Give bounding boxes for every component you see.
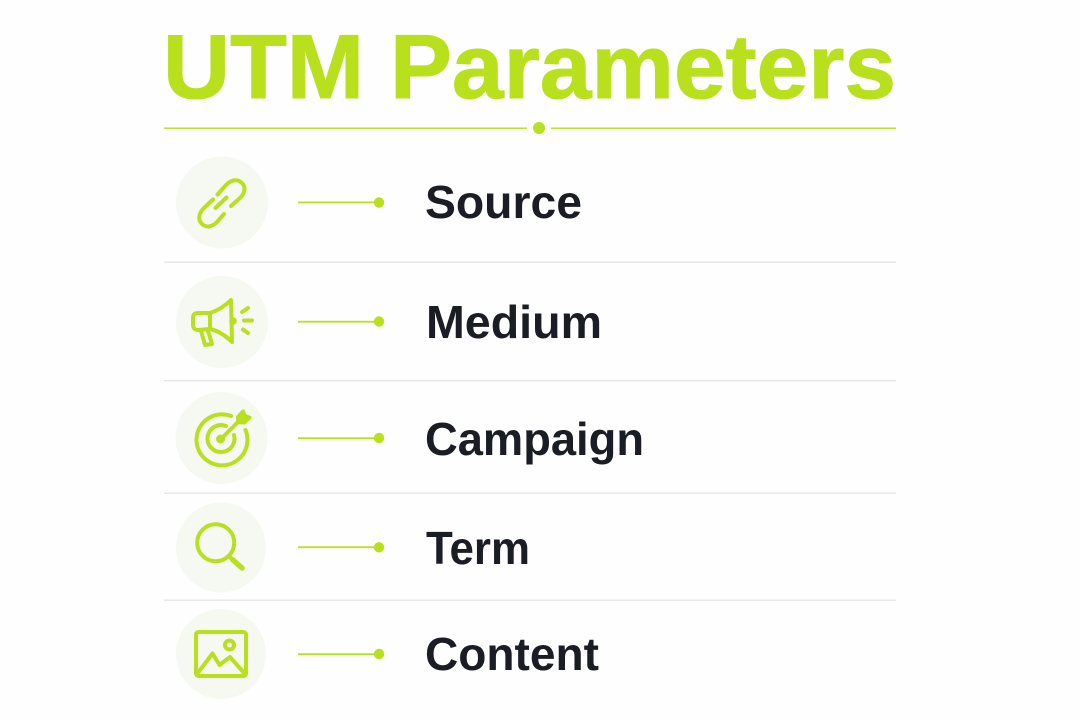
label: Campaign (425, 413, 644, 465)
row: medium (176, 276, 602, 368)
connector (298, 542, 384, 552)
icon: picture (176, 609, 266, 699)
connector (298, 433, 384, 443)
icon: chain link (176, 156, 268, 248)
title: UTM Parameters (163, 17, 896, 118)
icon: magnifying glass (176, 502, 266, 592)
connector (298, 649, 384, 659)
connector (298, 197, 384, 208)
label: Source (425, 176, 582, 228)
header divider with dot (164, 122, 896, 134)
icon: target with arrow (176, 392, 268, 484)
icon: megaphone (176, 276, 268, 368)
label: Term (426, 522, 530, 574)
label: Medium (426, 296, 602, 348)
label: Content (425, 628, 599, 680)
connector (298, 316, 384, 327)
row: source (176, 156, 582, 248)
row: campaign (176, 392, 644, 484)
row: content (176, 609, 599, 699)
row: term (176, 502, 530, 592)
